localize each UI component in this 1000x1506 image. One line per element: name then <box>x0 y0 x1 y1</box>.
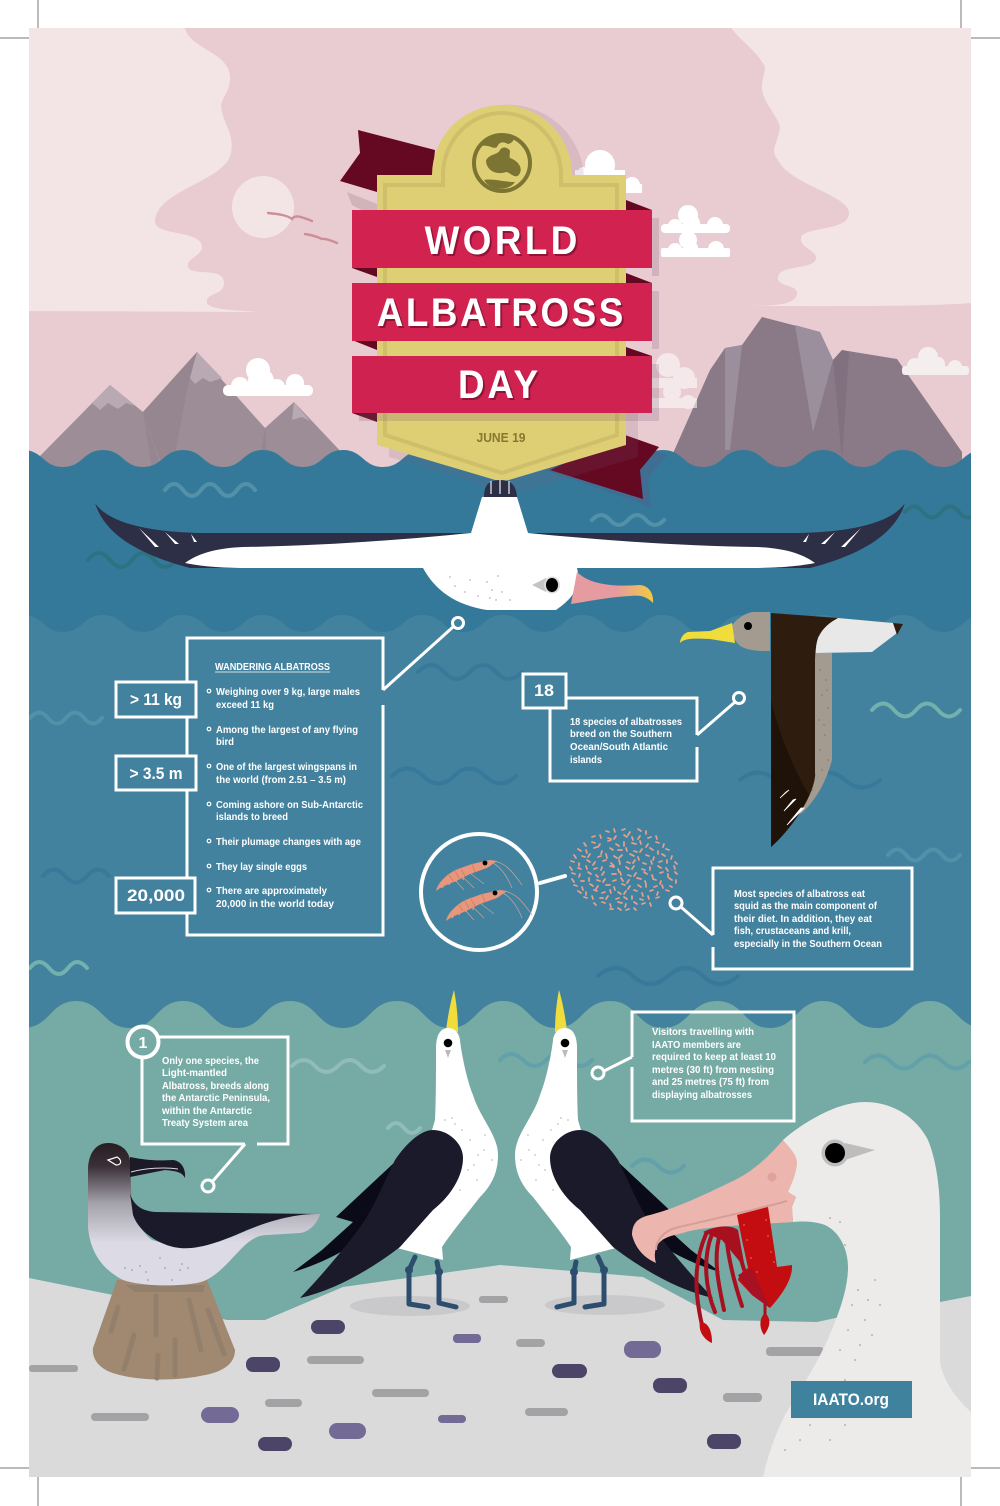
back ribbon right <box>545 435 667 507</box>
species text: breed on the Southern <box>570 728 672 740</box>
squid tentacles <box>696 1226 769 1343</box>
connector <box>670 897 713 935</box>
body <box>88 1143 320 1285</box>
shadow <box>350 1296 470 1316</box>
tail stripes <box>491 480 509 494</box>
eye <box>444 1039 452 1058</box>
bullet list: Among the largest of any flying <box>216 724 358 736</box>
bullet list: One of the largest wingspans in <box>216 761 357 773</box>
speckles <box>785 1218 880 1450</box>
light-mantled text: Light-mantled <box>162 1067 227 1079</box>
bullet list: islands to breed <box>216 811 288 823</box>
species text: Ocean/South Atlantic <box>570 741 668 753</box>
eye <box>822 1140 875 1166</box>
diet text: especially in the Southern Ocean <box>734 938 882 950</box>
faded clouds behind banner <box>652 353 697 409</box>
website label <box>791 1381 912 1418</box>
banner: albatross: ALBATROSS <box>377 291 623 335</box>
nest <box>93 1280 235 1379</box>
beak <box>446 990 458 1032</box>
lens <box>421 834 565 950</box>
nostril <box>768 1172 776 1182</box>
panel heading: WANDERING ALBATROSS <box>215 662 330 673</box>
eye <box>532 576 560 594</box>
ocean upper <box>23 450 983 640</box>
visitors text: metres (30 ft) from nesting <box>652 1064 774 1076</box>
krill 2 <box>446 890 532 921</box>
eye <box>561 1039 569 1058</box>
diet text: their diet. In addition, they eat <box>734 913 872 925</box>
light-mantled text: Only one species, the <box>162 1055 259 1067</box>
stat: over 11 kg: > 11 kg <box>130 690 182 709</box>
diet text <box>734 888 882 950</box>
belly <box>790 653 832 820</box>
diet text: fish, crustaceans and krill, <box>734 925 851 937</box>
banner: world <box>352 210 652 268</box>
krill swarm <box>570 829 677 910</box>
visitors text: IAATO members are <box>652 1039 741 1051</box>
cloud band right <box>731 28 971 306</box>
squiggle waves <box>30 484 977 984</box>
light-mantled text: Treaty System area <box>162 1117 248 1129</box>
number box: 18 <box>534 681 554 700</box>
bird: light-mantled albatross <box>88 1143 320 1285</box>
species text: islands <box>570 754 602 766</box>
bird: wandering albatross in flight <box>95 480 905 610</box>
beak <box>632 1140 797 1263</box>
mountain right <box>670 317 962 475</box>
ocean lower teal <box>29 1001 971 1322</box>
tail tip <box>484 480 517 497</box>
wings dark <box>95 503 905 568</box>
cloud white left <box>223 358 313 396</box>
panel frame <box>713 868 912 969</box>
bullet list: There are approximately <box>216 885 327 897</box>
bird: displaying albatross left <box>293 990 498 1316</box>
bird: displaying albatross right <box>515 990 720 1315</box>
ocean middle <box>23 615 983 1040</box>
shield shadow <box>389 105 638 494</box>
body <box>397 1028 498 1260</box>
banner shadows <box>359 218 659 421</box>
cloud small right <box>902 347 969 375</box>
primary feather marks <box>139 528 861 547</box>
panel frame <box>187 638 383 935</box>
bird: flying albatross side view <box>680 612 903 847</box>
eye <box>108 1157 121 1165</box>
bullet list <box>207 686 363 910</box>
diet text: Most species of albatross eat <box>734 888 865 900</box>
legs <box>557 1257 608 1307</box>
beak <box>571 572 653 604</box>
light-mantled text <box>161 1055 270 1129</box>
sky background <box>29 28 971 468</box>
beak line <box>656 1201 787 1250</box>
species text: 18 species of albatrosses <box>570 716 682 728</box>
shore ground <box>29 1265 971 1477</box>
panel: wandering albatross facts <box>116 618 464 935</box>
beak <box>680 623 735 643</box>
wing <box>550 1130 713 1298</box>
legs <box>405 1257 456 1307</box>
banner: day: DAY <box>458 363 538 407</box>
stat: over 3.5 m <box>116 756 196 790</box>
white back <box>816 618 897 653</box>
light-mantled text: the Antarctic Peninsula, <box>162 1092 270 1104</box>
connector <box>697 692 744 735</box>
bullet list: Weighing over 9 kg, large males <box>216 686 360 698</box>
speckles <box>521 1118 568 1190</box>
bullet list: Coming ashore on Sub-Antarctic <box>216 799 363 811</box>
visitors text <box>652 1026 776 1101</box>
wing dark <box>771 613 838 847</box>
back ribbon left <box>340 130 435 218</box>
panel: light-mantled albatross <box>128 1026 288 1192</box>
bullet list: 20,000 in the world today <box>216 898 334 910</box>
back wing <box>293 1160 400 1272</box>
wing <box>300 1130 463 1298</box>
number badge <box>128 1026 158 1058</box>
squid mantle <box>737 1207 792 1308</box>
stat: 20,000: 20,000 <box>127 886 185 905</box>
species text <box>570 716 682 766</box>
icon: globe <box>474 135 530 191</box>
website label: IAATO.org <box>813 1390 889 1409</box>
krill magnifier <box>421 834 565 950</box>
speckles <box>445 1118 492 1190</box>
banner: world: WORLD <box>425 219 577 263</box>
bullet list: Their plumage changes with age <box>216 836 361 848</box>
bullet list: bird <box>216 736 234 748</box>
light-mantled text: within the Antarctic <box>161 1105 252 1117</box>
body <box>763 1102 971 1477</box>
squiggle waves on teal <box>292 1060 420 1133</box>
speckles <box>125 1258 188 1280</box>
cloud band left <box>29 28 257 312</box>
krill 1 <box>436 860 522 891</box>
bullet list: They lay single eggs <box>216 861 307 873</box>
visitors text: and 25 metres (75 ft) from <box>652 1076 769 1088</box>
bird: large albatross with squid <box>632 1102 971 1477</box>
panel: diet <box>670 868 912 969</box>
light-mantled text: Albatross, breeds along <box>162 1080 269 1092</box>
wing tip <box>893 623 903 635</box>
stat: 20,000 <box>116 878 195 913</box>
visitors text: Visitors travelling with <box>652 1026 754 1038</box>
beak <box>130 1157 185 1178</box>
sun <box>232 176 294 238</box>
ribbon folds <box>352 200 652 422</box>
date: JUNE 19 <box>476 430 526 445</box>
clouds behind badge <box>575 150 730 257</box>
mountains left <box>38 352 345 470</box>
badge: world albatross day <box>340 105 667 507</box>
wings and body white <box>185 497 815 610</box>
banner: day <box>352 356 652 413</box>
panel: 18 species <box>523 674 744 781</box>
panel frame <box>550 698 697 781</box>
head <box>732 612 770 651</box>
beak <box>555 990 567 1032</box>
connector <box>202 1144 245 1192</box>
wing <box>130 1193 320 1248</box>
banner: albatross <box>352 283 652 341</box>
speckles <box>812 670 828 790</box>
speckles <box>450 576 510 600</box>
eye <box>744 622 752 630</box>
feather marks <box>780 790 804 825</box>
number badge: 1 <box>139 1035 148 1052</box>
visitors text: required to keep at least 10 <box>652 1051 776 1063</box>
panel frame <box>632 1012 794 1121</box>
bullet list: the world (from 2.51 – 3.5 m) <box>216 774 346 786</box>
diet text: squid as the main component of <box>734 900 877 912</box>
pebbles <box>29 1296 824 1451</box>
bullet list: exceed 11 kg <box>216 699 274 711</box>
shield <box>377 105 626 482</box>
body <box>515 1028 616 1260</box>
shadow <box>545 1295 665 1315</box>
stat: over 11 kg <box>116 682 196 717</box>
distant birds <box>268 213 337 243</box>
squiggle waves on teal darker <box>500 1054 969 1172</box>
panel: visitors <box>592 1012 794 1121</box>
stat: over 3.5 m: > 3.5 m <box>130 764 182 783</box>
back wing <box>613 1160 720 1272</box>
connector <box>592 1057 632 1079</box>
number box <box>523 674 566 708</box>
panel frame <box>142 1037 288 1144</box>
shield inner line <box>385 113 617 473</box>
visitors text: displaying albatrosses <box>652 1089 752 1101</box>
connector <box>383 618 464 690</box>
